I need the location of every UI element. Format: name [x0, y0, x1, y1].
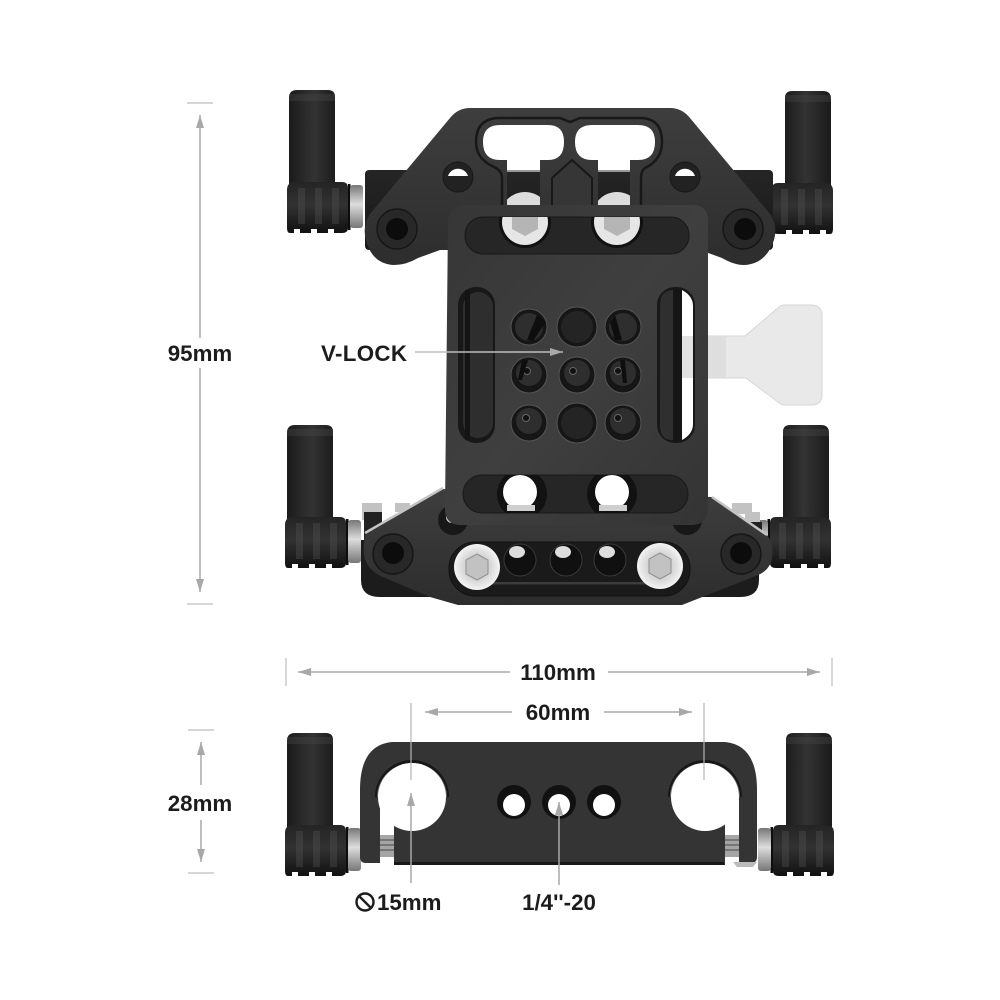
dimension: 60mm: 60mm	[526, 700, 590, 725]
top slot	[464, 216, 690, 254]
silver bolt left	[454, 544, 500, 590]
knob: upper right	[757, 91, 833, 234]
bottom slot	[462, 474, 688, 514]
rod hole right	[668, 760, 742, 835]
dimension: 28mm: 28mm	[168, 791, 232, 816]
small threaded holes	[497, 785, 621, 819]
knob: lower left	[285, 425, 361, 568]
screws	[379, 835, 740, 857]
label: V-LOCK: V-LOCK	[321, 341, 407, 366]
knob: upper left	[287, 90, 363, 233]
top view: cage mount assembly	[285, 90, 833, 605]
dimension: 28mm	[168, 730, 232, 873]
dimension: 95mm: 95mm	[168, 341, 232, 366]
lower bracket	[364, 488, 772, 605]
center T web	[552, 160, 592, 205]
dimension: 110mm	[286, 658, 832, 686]
bracket holes	[504, 544, 536, 576]
upper rod clamp block	[365, 170, 773, 250]
side slots	[458, 287, 695, 443]
knob: clamp left	[285, 733, 361, 876]
thumb lever (transparent)	[680, 305, 822, 405]
knob: lower right	[755, 425, 831, 568]
dimension: 95mm	[168, 103, 232, 604]
small holes	[443, 162, 473, 192]
clamp body	[360, 742, 757, 865]
lower rod clamp block	[361, 503, 762, 597]
label: 1/4"-20	[522, 802, 596, 915]
label: 15mm diameter	[356, 793, 441, 915]
hole grid	[511, 307, 641, 443]
V-lock plate	[445, 196, 708, 525]
dimension: 110mm: 110mm	[520, 660, 596, 685]
silver bolt right	[637, 543, 683, 589]
dimension: 60mm	[411, 700, 704, 780]
upper bracket	[365, 108, 775, 265]
knob: clamp right	[758, 733, 834, 876]
lobe holes	[377, 209, 417, 249]
label: 1/4"-20: 1/4''-20	[522, 890, 596, 915]
upper bolt heads	[500, 192, 642, 242]
lower slot	[449, 542, 690, 596]
window outline	[476, 118, 662, 205]
lobe holes	[373, 534, 413, 574]
bottom view: rod clamp	[285, 733, 834, 876]
corner holes	[438, 505, 468, 535]
label: 15mm diameter: 15mm	[377, 890, 441, 915]
rod hole left	[375, 760, 449, 835]
